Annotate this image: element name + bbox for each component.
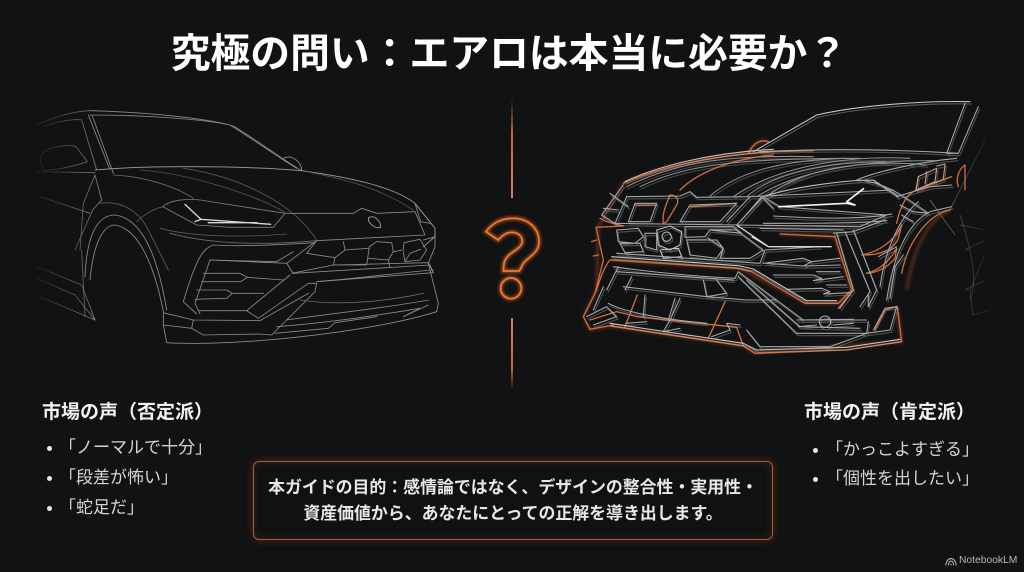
callout: guide purpose [253, 461, 773, 540]
divider line bottom [511, 318, 513, 389]
callout: guide purpose: 資産価値から、あなたにとっての正解を導き出します。 [303, 504, 723, 523]
bullet list: negative voices [47, 438, 212, 517]
secondary parallel detail lines [588, 104, 980, 352]
grille accent [737, 225, 832, 247]
grille honeycomb [617, 228, 657, 253]
orange glow [583, 141, 950, 353]
fender [868, 202, 952, 307]
bullet list: positive voices: 「かっこよすぎる」 [826, 440, 979, 459]
bullet list: positive voices: 「個性を出したい」 [826, 469, 979, 488]
headlight DRL [778, 188, 864, 207]
lower intake [613, 267, 867, 320]
hood [95, 167, 435, 247]
white/grey detail lines [587, 102, 978, 350]
bullet list: negative voices: 「ノーマルで十分」 [59, 438, 212, 457]
bullet list: negative voices: 「段差が怖い」 [59, 468, 178, 487]
icon: neon question mark [482, 214, 543, 302]
callout: guide purpose: 本ガイドの目的：感情論ではなく、デザインの整合性・実用性・ [268, 478, 758, 497]
heading: negative voices: 市場の声（否定派） [42, 402, 213, 423]
bullet list: positive voices [813, 440, 979, 488]
wheel arch [85, 215, 167, 310]
title: 究極の問い：エアロは本当に必要か？ [171, 32, 847, 76]
divider line top [511, 100, 513, 198]
bumper [163, 293, 308, 321]
intake [195, 241, 317, 314]
panel: negative market voices [42, 402, 213, 517]
headlight [163, 199, 285, 227]
rear body faint lines [930, 140, 990, 315]
panel: positive market voices [804, 402, 979, 488]
bullet list: negative voices: 「蛇足だ」 [59, 498, 144, 517]
heading: positive voices: 市場の声（肯定派） [804, 402, 975, 423]
watermark: NotebookLM: NotebookLM [959, 555, 1017, 566]
orange accent lines [583, 141, 965, 353]
grille [307, 241, 345, 258]
